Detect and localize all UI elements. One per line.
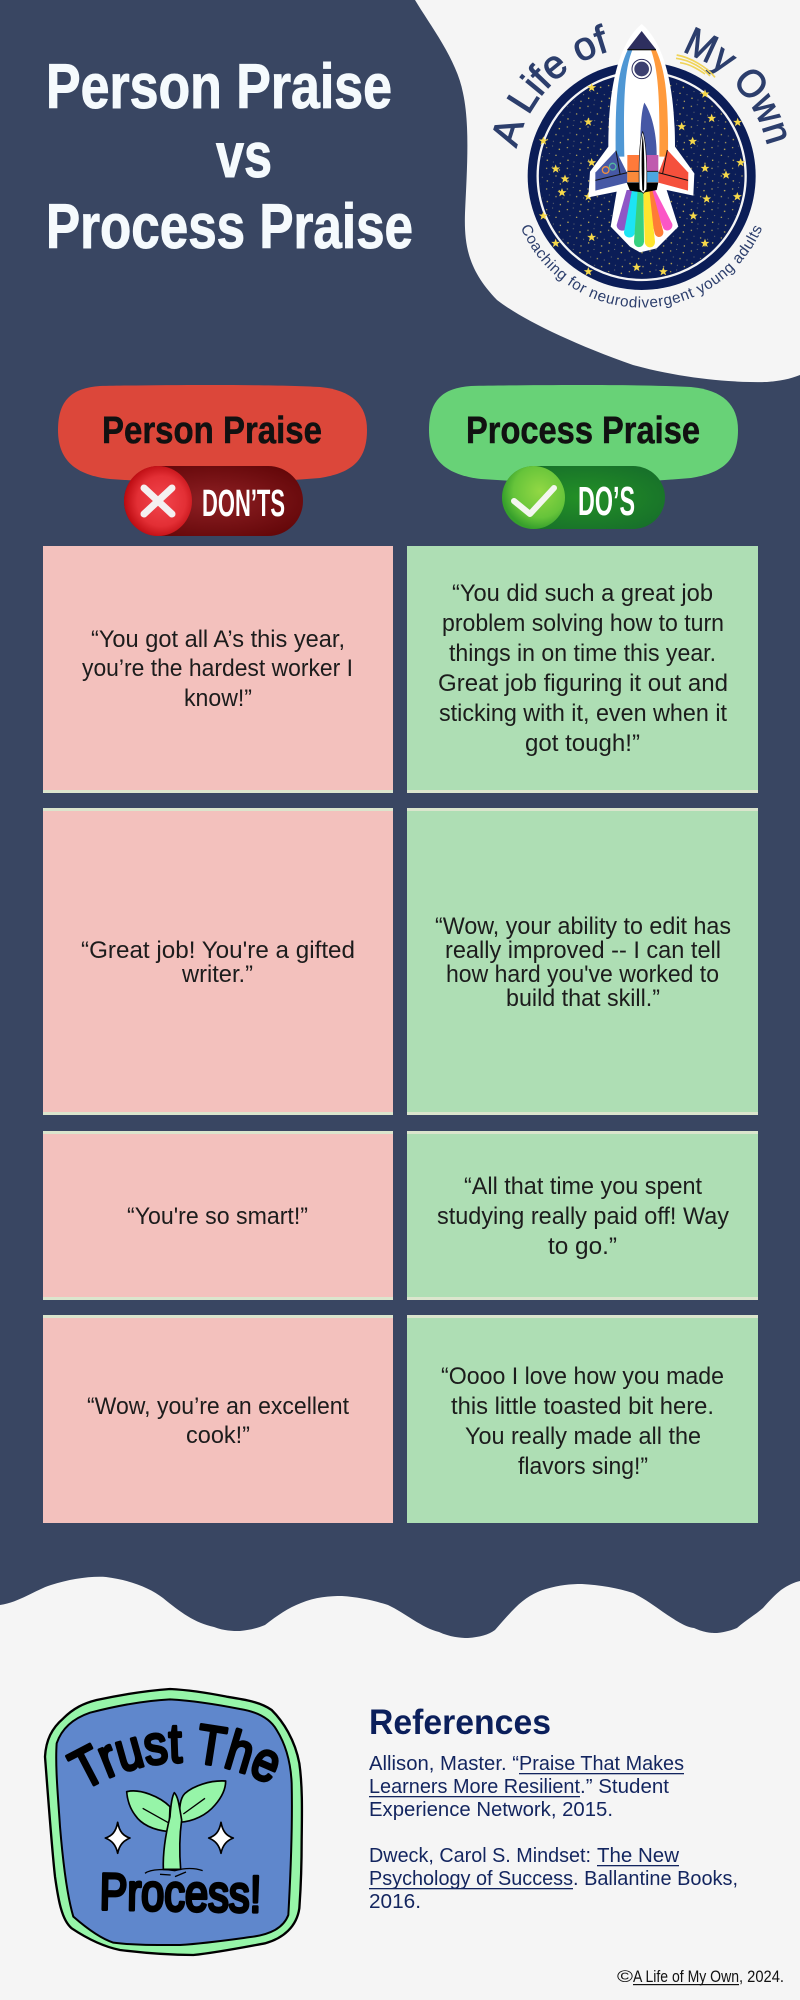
quote text: “You're so smart!”	[127, 1203, 308, 1230]
quote text: “Great job! You're a gifted	[81, 937, 355, 964]
logo: A Life of My Own rocket badge	[493, 23, 786, 308]
footer wave background	[0, 1577, 800, 2000]
copyright footer: A Life of My Own	[633, 1967, 739, 1986]
reference: Dweck: Psychology of Success	[369, 1868, 573, 1890]
quote text: studying really paid off! Way	[437, 1203, 729, 1230]
pill: person praise: Person Praise	[102, 410, 322, 452]
quote text: build that skill.”	[506, 985, 660, 1012]
logo starfield circle	[528, 62, 756, 290]
sticker: Trust The Process	[44, 1688, 304, 1956]
quote text: “You got all A’s this year,	[91, 626, 345, 653]
quote text	[82, 626, 353, 712]
quote text: you’re the hardest worker I	[82, 655, 353, 682]
reference: Dweck: Dweck, Carol S. Mindset:	[369, 1845, 591, 1867]
badge: don'ts	[124, 466, 303, 536]
title: Person Praise	[46, 52, 392, 122]
logo rocket	[588, 24, 694, 252]
quote text: cook!”	[186, 1422, 250, 1449]
quote text	[435, 913, 731, 1012]
badge: don'ts: DON’TS	[202, 483, 285, 525]
copyright footer: ©	[617, 1967, 634, 1986]
quote text: really improved -- I can tell	[445, 937, 721, 964]
reference: Dweck: The New	[597, 1845, 680, 1867]
quote text: problem solving how to turn	[442, 610, 724, 637]
logo wordmark	[493, 23, 786, 149]
card: process praise 4	[407, 1315, 758, 1523]
quote text	[441, 1363, 724, 1480]
card: process praise 2	[407, 808, 758, 1115]
reference: Allison	[369, 1753, 684, 1821]
quote text: got tough!”	[525, 730, 640, 757]
card: person praise 2	[43, 808, 393, 1115]
title: vs	[216, 121, 272, 191]
badge: do's	[502, 466, 665, 529]
quote text: “Wow, you’re an excellent	[87, 1393, 349, 1420]
pill: process praise: Process Praise	[466, 410, 700, 452]
quote text: “Wow, your ability to edit has	[435, 913, 731, 940]
sticker lettering: Trust The	[65, 1723, 279, 1786]
quote text: how hard you've worked to	[446, 961, 719, 988]
references heading: References	[369, 1703, 551, 1742]
quote text: writer.”	[181, 961, 253, 988]
logo wordmark: A Life of	[493, 23, 607, 149]
reference: Dweck	[369, 1845, 738, 1913]
quote text	[438, 580, 728, 757]
card: process praise 1	[407, 546, 758, 793]
reference: Allison: Allison, Master. “	[369, 1753, 519, 1775]
quote text: “Oooo I love how you made	[441, 1363, 724, 1390]
quote text: “You did such a great job	[452, 580, 713, 607]
reference: Dweck: 2016.	[369, 1891, 421, 1913]
title	[46, 52, 413, 262]
reference: Allison: Praise That Makes	[519, 1753, 684, 1775]
quote text	[87, 1393, 349, 1449]
quote text: You really made all the	[465, 1423, 701, 1450]
quote text: this little toasted bit here.	[451, 1393, 714, 1420]
reference: Allison: Experience Network, 2015.	[369, 1799, 613, 1821]
copyright footer: , 2024.	[739, 1967, 784, 1986]
logo tagline: Coaching for neurodivergent young adults	[522, 225, 762, 308]
quote text: know!”	[184, 685, 252, 712]
sticker sprout	[105, 1781, 233, 1877]
quote text: “All that time you spent	[464, 1173, 702, 1200]
header logo blob	[415, 0, 800, 382]
logo wordmark: My Own	[684, 26, 786, 144]
reference: Allison: Learners More Resilient	[369, 1776, 580, 1798]
quote text	[437, 1173, 729, 1260]
title: Process Praise	[46, 192, 413, 262]
sticker lettering: Process!	[99, 1862, 262, 1923]
quote text: sticking with it, even when it	[439, 700, 727, 727]
quote text	[81, 937, 355, 988]
quote text: things in on time this year.	[449, 640, 716, 667]
quote text: flavors sing!”	[518, 1453, 648, 1480]
card: person praise 3	[43, 1131, 393, 1300]
sticker lettering	[65, 1723, 279, 1923]
pill: person praise	[58, 385, 367, 483]
card: person praise 4	[43, 1315, 393, 1523]
quote text: Great job figuring it out and	[438, 670, 728, 697]
reference: Dweck: . Ballantine Books,	[573, 1868, 738, 1890]
reference: Allison: .” Student	[580, 1776, 669, 1798]
badge: do's: DO’S	[578, 478, 635, 524]
card: person praise 1	[43, 546, 393, 793]
quote text: to go.”	[548, 1233, 617, 1260]
pill: process praise	[429, 385, 738, 483]
card: process praise 3	[407, 1131, 758, 1300]
